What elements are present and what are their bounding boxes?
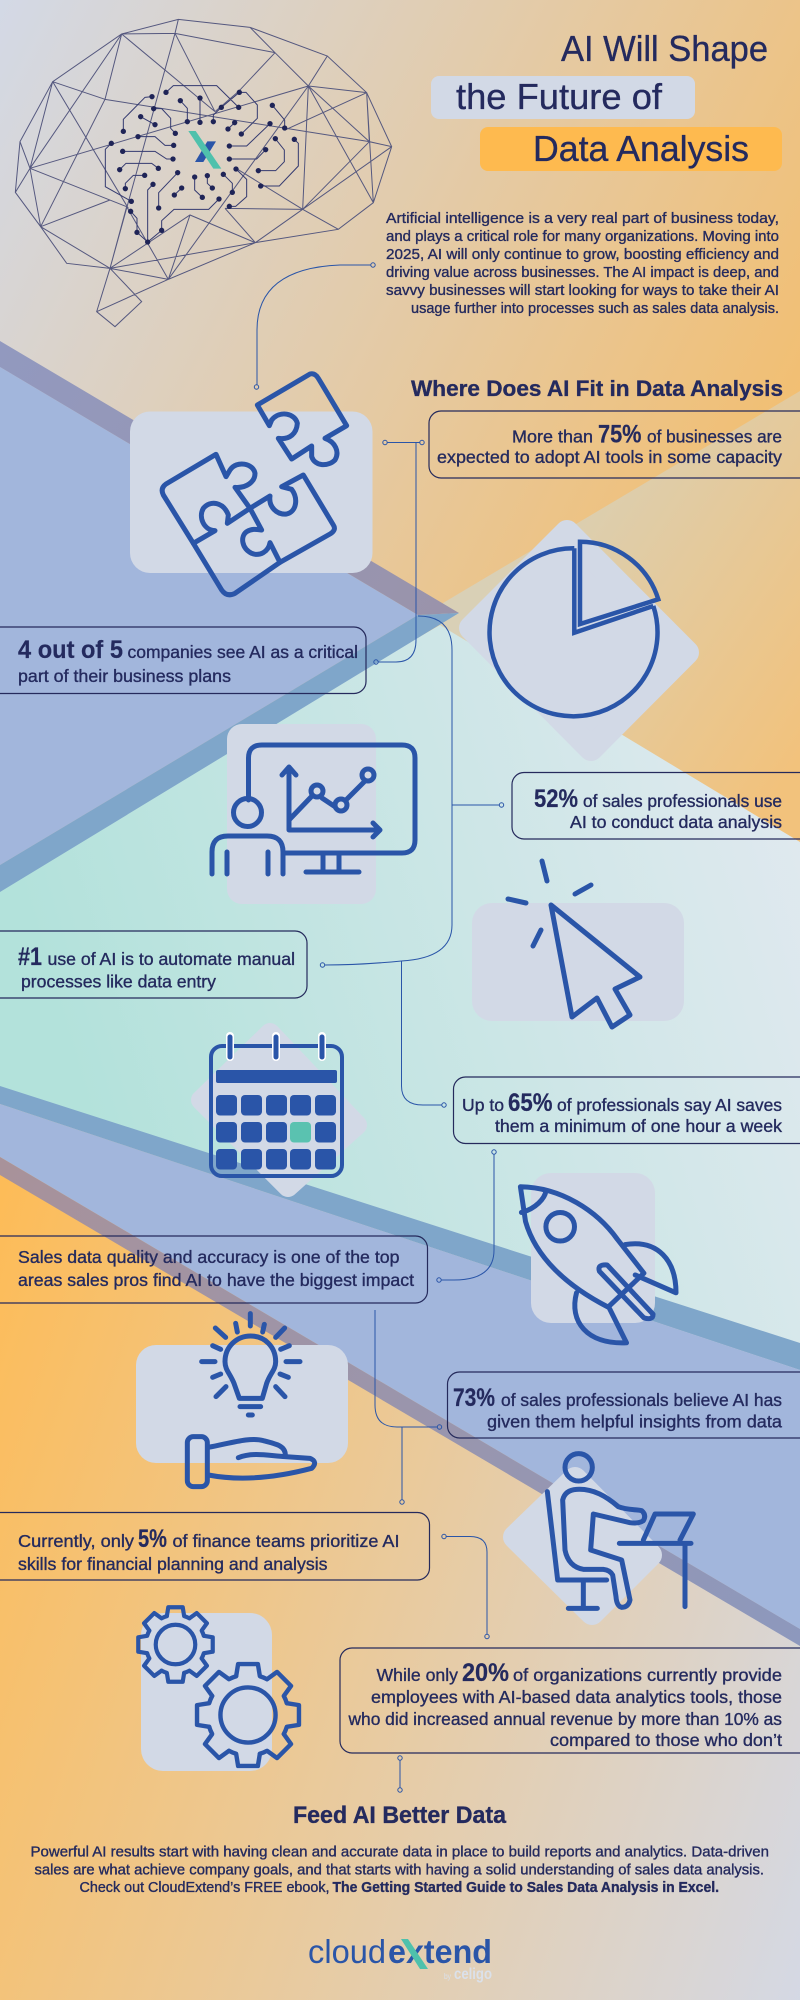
callout: 5% of finance teams: of finance teams prioritize AI <box>172 1531 400 1551</box>
closing paragraph: Check out CloudExtend’s FREE ebook, <box>80 1880 330 1896</box>
callout: 20% of organizations: While only <box>376 1665 458 1685</box>
title: Data Analysis <box>533 128 749 169</box>
callout: #1 use of AI <box>0 931 307 998</box>
callout: 52% of sales professionals: AI to conduct data analysis <box>570 812 782 832</box>
callout: sales data quality <box>0 1236 428 1303</box>
title: AI Will Shape <box>561 28 768 69</box>
closing paragraph <box>30 1844 769 1896</box>
intro paragraph <box>386 210 779 317</box>
callout: 5% of finance teams: skills for financial planning and analysis <box>18 1554 328 1574</box>
callout: 5% of finance teams: 5% <box>138 1525 167 1553</box>
icon: calendar <box>201 1033 357 1187</box>
connector: intro to puzzle <box>254 263 375 389</box>
callout: 73% of sales professionals <box>448 1372 800 1438</box>
callout: 4 out of 5: 4 out of 5 <box>18 636 123 664</box>
callout: #1 use of AI: processes like data entry <box>21 972 216 992</box>
callout: 20% of organizations: who did increased annual revenue by more than 10% as <box>348 1709 782 1729</box>
callout: 5% of finance teams: Currently, only <box>18 1531 134 1551</box>
title: the Future of <box>456 76 663 117</box>
panel: puzzle icon backdrop <box>130 412 372 573</box>
callout: 20% of organizations: of organizations currently provide <box>513 1665 782 1685</box>
callout: 65% of professionals: of professionals say AI saves <box>557 1095 782 1115</box>
callout: 65% of professionals: them a minimum of one hour a week <box>495 1116 782 1136</box>
callout: 20% of organizations <box>340 1648 800 1753</box>
callout: 20% of organizations: employees with AI-based data analytics tools, those <box>371 1687 782 1707</box>
connector: 20% to closing <box>398 1756 402 1792</box>
connector: central branch <box>320 616 504 1107</box>
icon: gears <box>138 1607 299 1771</box>
connector: 65% to sales data quality <box>437 1150 496 1282</box>
callout: 73% of sales professionals: 73% <box>453 1384 495 1412</box>
callout: 75% of businesses: of businesses are <box>647 426 782 446</box>
callout: 65% of professionals <box>454 1077 800 1144</box>
callout: 65% of professionals: Up to <box>462 1095 504 1115</box>
callout: #1 use of AI: use of AI is to automate manual <box>48 949 295 969</box>
icon: light bulb and hand <box>136 1314 348 1487</box>
logo: cloudextend by celigo: by <box>444 1972 451 1981</box>
callout: 75% of businesses <box>429 411 800 478</box>
callout: 65% of professionals: 65% <box>508 1089 552 1117</box>
callout: 4 out of 5 <box>0 627 366 694</box>
heading: where does AI fit: Where Does AI Fit in Data Analysis <box>411 376 783 401</box>
connector: puzzle to 4 out of 5 <box>374 440 424 664</box>
callout: 52% of sales professionals: of sales professionals use <box>583 791 782 811</box>
icon: cursor <box>472 861 684 1027</box>
intro paragraph: and plays a critical role for many organizations. Moving into <box>386 228 779 245</box>
intro paragraph: driving value across businesses. The AI impact is deep, and <box>386 264 779 281</box>
callout: 75% of businesses: More than <box>512 426 593 446</box>
callout: 5% of finance teams <box>0 1512 430 1580</box>
logo: cloudextend by celigo: celigo <box>454 1966 492 1983</box>
callout: 75% of businesses: expected to adopt AI tools in some capacity <box>437 447 782 467</box>
heading: feed AI better data: Feed AI Better Data <box>293 1802 507 1829</box>
icon: pie chart <box>471 532 687 749</box>
logo: cloudextend by celigo: extend <box>388 1933 492 1970</box>
icon: presenter with chart <box>212 724 415 904</box>
logo: cloudextend by celigo <box>308 1933 492 1983</box>
closing paragraph: The Getting Started Guide to Sales Data Analysis in Excel. <box>332 1880 719 1896</box>
intro paragraph: usage further into processes such as sales data analysis. <box>411 300 779 317</box>
intro paragraph: Artificial intelligence is a very real part of business today, <box>386 210 779 227</box>
callout: 20% of organizations: compared to those who don’t <box>550 1730 782 1750</box>
connector: sales data to 73% <box>375 1310 442 1504</box>
icon: worker at laptop <box>515 1454 693 1613</box>
callout: 52% of sales professionals: 52% <box>534 785 578 813</box>
connector: 5% to 20% <box>442 1534 489 1639</box>
icon: wireframe brain with circuit <box>15 19 392 327</box>
callout: 52% of sales professionals <box>512 772 800 839</box>
closing paragraph: Powerful AI results start with having clean and accurate data in place to build reports and analytics. Data-driven <box>30 1844 769 1860</box>
callout: 73% of sales professionals: given them helpful insights from data <box>487 1412 782 1432</box>
intro paragraph: savvy businesses will start looking for ways to take their AI <box>386 282 779 299</box>
icon: rocket <box>520 1173 676 1343</box>
callout: sales data quality: Sales data quality and accuracy is one of the top <box>18 1247 399 1267</box>
callout: 20% of organizations: 20% <box>462 1659 509 1687</box>
title <box>431 28 782 171</box>
callout: 4 out of 5: companies see AI as a critical <box>128 642 358 662</box>
callout: 4 out of 5: part of their business plans <box>18 666 231 686</box>
closing paragraph: sales are what achieve company goals, and that starts with having a solid understanding of sales data analysis. <box>34 1862 764 1878</box>
logo: cloudextend by celigo: cloud <box>308 1933 386 1970</box>
callout: #1 use of AI: #1 <box>18 943 42 971</box>
callout: 73% of sales professionals: of sales professionals believe AI has <box>501 1390 782 1410</box>
icon: puzzle pieces <box>162 374 347 595</box>
intro paragraph: 2025, AI will only continue to grow, boosting efficiency and <box>386 246 779 263</box>
callout: 75% of businesses: 75% <box>598 420 642 448</box>
callout: sales data quality: areas sales pros find AI to have the biggest impact <box>18 1270 414 1290</box>
